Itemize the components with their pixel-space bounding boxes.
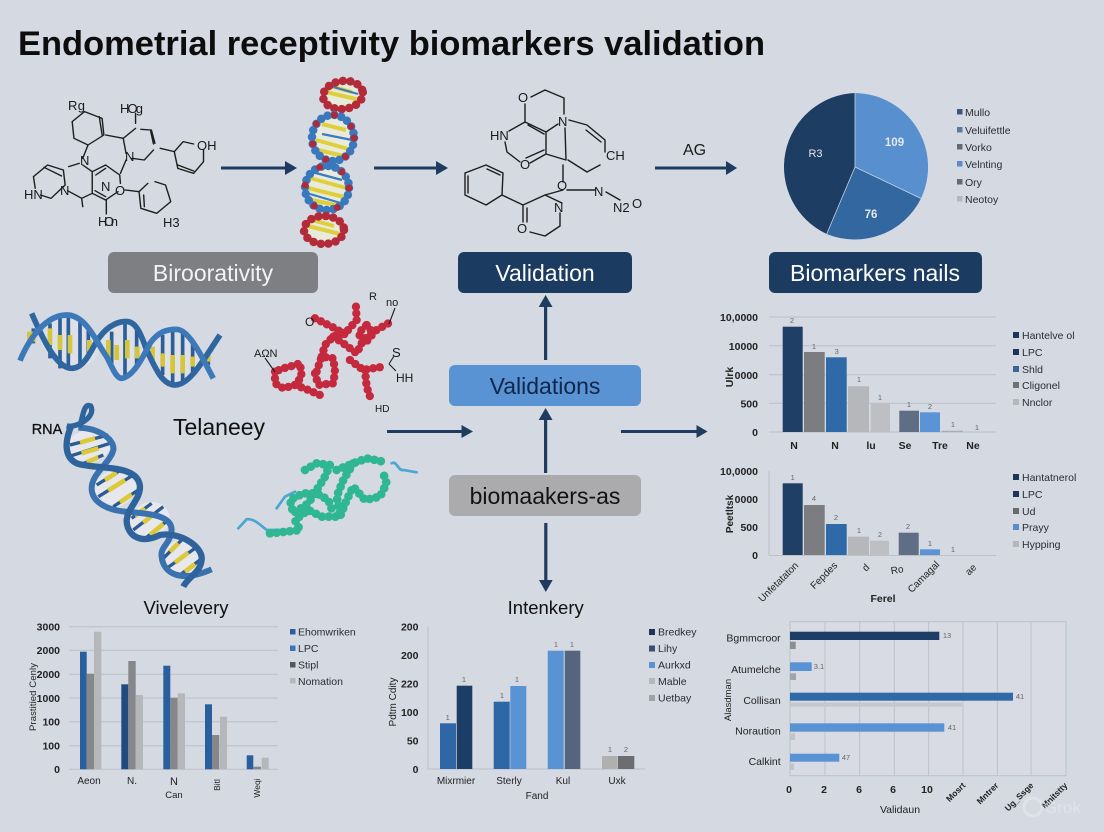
bar chart: bottom middle: 1 [446,713,450,722]
bar chart: top right: 10,0000 [720,312,758,324]
bar chart: bottom middle: 50 [407,736,419,748]
legend: pie: Vorko [965,142,992,154]
bar chart: top right: N [831,440,839,452]
bar chart: middle right: 0 [752,550,758,562]
bar chart: bottom left: 100 [42,740,60,752]
horizontal bar chart: bottom right: Collisan [743,695,781,707]
bar chart: bottom left: Can [165,790,183,801]
bar chart: middle right: Peetltsk [725,494,736,533]
bar chart: bottom middle: 1 [515,675,519,684]
bar chart: middle right: 0000 [735,494,758,506]
bar chart: bottom left: Aeon [77,776,101,787]
bar chart: bottom middle: Pdtm Cdity [388,678,399,726]
legend: bottom left bar chart: Ehomwriken [298,626,356,638]
pill: Biomarkers nails: Biomarkers nails [790,260,960,286]
legend: middle right bar chart: Hypping [1022,539,1061,551]
icon: molecule structure 1: HN [24,187,43,202]
icon: molecule structure 1: O [115,183,125,198]
watermark: Grok [1024,798,1081,817]
horizontal bar chart: bottom right: Noraution [735,726,781,738]
bar chart: bottom left: 2000 [37,645,60,657]
bar chart: bottom left: Weqi [252,778,262,798]
arrow: into Validations [387,425,473,438]
bar chart: bottom middle: Mixrmier [437,776,476,787]
bar chart: middle right: Ro [890,564,905,577]
bar chart: middle right [720,466,996,605]
icon: molecule structure 2: O [520,157,530,172]
bar chart: middle right: Fepdes [809,560,840,592]
legend: bottom middle bar chart [649,626,697,704]
icon: molecule structure 1 [24,98,216,230]
horizontal bar chart: bottom right [723,622,1070,816]
bar chart: middle right: Ferel [870,593,896,605]
label: AG: AG [683,142,706,159]
legend: top right bar chart: Hantelve ol [1022,330,1075,342]
bar chart: middle right: 1 [791,473,795,482]
icon: molecule structure 1: H3 [163,215,180,230]
bar chart: top right: 2 [928,402,932,411]
legend: top right bar chart: Shld [1022,364,1043,376]
bar chart: middle right: d [860,562,872,574]
icon: molecule structure 1: OH [197,138,216,153]
arrow: down to Intenkery [539,523,553,592]
bar chart: top right: N [790,440,798,452]
legend: middle right bar chart: Prayy [1022,522,1050,534]
icon: molecule structure 2: O [632,196,642,211]
bar chart: top right: 2 [790,316,794,325]
icon: molecule structure 1: HOn [98,214,118,229]
bar chart: top right: 10000 [729,341,758,353]
heading: Vivelevery: Vivelevery [143,597,229,618]
icon: molecule structure 1: N [60,183,69,198]
horizontal bar chart: bottom right: Ug_Ssge [1003,780,1036,813]
bar chart: bottom middle: 200 [401,650,419,662]
icon: red protein chain: O [305,315,314,329]
bar chart: top right: lu [866,440,876,452]
bar chart: bottom left: 0 [54,764,60,776]
arrow: up to Validations [539,408,552,473]
heading: Intenkery: Intenkery [508,597,584,618]
legend: pie: Neotoy [965,194,999,206]
legend: bottom middle bar chart: Mable [658,676,687,688]
horizontal bar chart: bottom right: 13 [943,631,951,640]
bar chart: bottom middle: Fand [526,791,548,802]
bar chart: bottom middle: 1 [500,691,504,700]
bar chart: bottom middle: 2 [624,745,628,754]
pie chart: 109 [885,137,904,149]
bar chart: middle right: Unfetataton [757,560,801,605]
icon: molecule structure 1: N [125,149,134,164]
legend: pie [957,107,1011,206]
legend: top right bar chart: Cligonel [1022,380,1060,392]
watermark: Grok: Grok [1044,798,1081,817]
bar chart: top right: 1 [975,423,979,432]
pill: biomarkers: biomaakers-as [470,483,620,509]
bar chart: top right: 3 [835,347,839,356]
arrow: DNA to structure [374,161,448,175]
icon: molecule structure 2: N [594,184,603,199]
arrow: up to Validation [539,295,552,360]
icon: beaded DNA double helix [304,78,365,244]
bar chart: middle right: 1 [951,545,955,554]
bar chart: bottom left: Prastitied Cenly [28,663,39,731]
legend: bottom left bar chart [290,626,356,688]
bar chart: bottom left: N [170,776,178,788]
pie chart [784,93,928,240]
icon: molecule structure 2: HN [490,128,509,143]
horizontal bar chart: bottom right: 3.1 [814,662,824,671]
icon: red protein chain: AΩN [254,348,278,360]
title: Endometrial receptivity biomarkers validation [18,25,765,63]
pill: Validation [458,252,632,293]
bar chart: bottom middle: Kul [556,776,570,787]
bar chart: middle right: ae [963,562,979,578]
bar chart: middle right: 2 [878,530,882,539]
icon: molecule structure 1: HOg [120,101,143,116]
legend: middle right bar chart: Hantatnerol [1022,472,1076,484]
label: Telaneey: Telaneey [173,414,266,440]
bar chart: bottom left [28,622,278,801]
horizontal bar chart: bottom right: 2 [821,784,827,796]
bar chart: middle right: 1 [857,526,861,535]
bar chart: middle right: 1 [928,539,932,548]
bar chart: bottom middle [388,622,645,802]
icon: red protein chain: HH [396,371,413,385]
bar chart: bottom left: Bitl [212,779,222,791]
horizontal bar chart: bottom right: 41 [948,723,956,732]
legend: top right bar chart: LPC [1022,347,1043,359]
legend: bottom left bar chart: Nomation [298,676,343,688]
icon: molecule structure 1: N [80,153,89,168]
bar chart: bottom middle: Sterly [496,776,522,787]
arrow: structure to pie [655,161,737,175]
pie chart: 76 [865,209,877,221]
bar chart: bottom middle: 0 [413,764,419,776]
legend: pie: Ory [965,177,983,189]
pill: Bioreactivity: Biroorativity [153,260,274,286]
bar chart: top right [720,312,996,452]
icon: diagonal RNA ribbon: RNA [32,422,63,438]
bar chart: top right: 0000 [735,370,758,382]
horizontal bar chart: bottom right: Atumelche [731,664,781,676]
bar chart: top right: Ulrk [724,367,736,387]
legend: middle right bar chart: Ud [1022,506,1036,518]
horizontal bar chart: bottom right: Validaun [880,804,920,816]
bar chart: bottom middle: 1 [462,675,466,684]
horizontal bar chart: bottom right: Mnitstty [1039,780,1070,810]
bar chart: top right: 1 [878,393,882,402]
pie chart: R3 [808,148,823,160]
icon: red protein chain: no [386,297,398,309]
legend: bottom middle bar chart: Aurkxd [658,660,691,672]
bar chart: top right: Se [899,440,912,452]
legend: bottom middle bar chart: Lihy [658,643,678,655]
horizontal bar chart: bottom right: Bgmmcroor [726,632,781,644]
legend: bottom left bar chart: LPC [298,643,319,655]
icon: diagonal RNA ribbon [32,405,212,587]
bar chart: bottom middle: 1 [570,640,574,649]
legend: pie: Mullo [965,107,990,119]
legend: bottom middle bar chart: Uetbay [658,692,692,704]
icon: molecule structure 2: O [557,178,567,193]
icon: molecule structure 1: Rg [68,98,85,113]
pill: Bioreactivity [108,252,318,293]
icon: molecule structure 1: N [101,179,110,194]
bar chart: bottom left: 3000 [37,622,60,634]
bar chart: bottom middle: Uxk [608,776,627,787]
bar chart: top right: 500 [740,398,758,410]
icon: green protein chain [238,458,417,533]
icon: molecule structure 2: N [558,114,567,129]
bar chart: middle right: 2 [834,513,838,522]
bar chart: bottom left: N. [127,776,137,787]
pill: Biomarkers nails [769,252,982,293]
icon: horizontal DNA ribbon [20,313,220,385]
bar chart: top right: 1 [812,342,816,351]
legend: bottom left bar chart: Stipl [298,660,318,672]
arrow: out to bar charts [621,425,708,438]
legend: pie: Veluifettle [965,125,1011,137]
horizontal bar chart: bottom right: 6 [856,784,862,796]
pill: Validations: Validations [490,373,600,399]
bar chart: bottom middle: 1 [608,745,612,754]
bar chart: top right: Ne [966,440,980,452]
horizontal bar chart: bottom right: 6 [890,784,896,796]
pill: Validations [449,365,641,406]
bar chart: middle right: Camagal [906,559,942,595]
pill: Validation: Validation [495,260,595,286]
bar chart: top right: 0 [752,427,758,439]
icon: red protein chain [254,291,413,415]
horizontal bar chart: bottom right: 0 [786,784,792,796]
bar chart: top right: 1 [857,375,861,384]
icon: red protein chain: R [369,291,377,303]
icon: molecule structure 2: N2 [613,200,630,215]
bar chart: bottom middle: 200 [401,622,419,634]
horizontal bar chart: bottom right: 41 [1016,692,1024,701]
bar chart: middle right: 10,0000 [720,466,758,478]
bar chart: bottom left: 100 [42,716,60,728]
icon: molecule structure 2 [465,90,642,236]
icon: red protein chain: HD [375,404,389,415]
bar chart: middle right: 2 [906,522,910,531]
bar chart: middle right: 500 [740,522,758,534]
icon: molecule structure 2: N [554,200,563,215]
icon: molecule structure 2: O [517,221,527,236]
horizontal bar chart: bottom right: Calkint [749,756,781,768]
legend: top right bar chart [1013,330,1075,409]
horizontal bar chart: bottom right: Alasdman [723,679,734,721]
arrow: molecule to DNA [221,161,297,175]
bar chart: bottom middle: 1 [554,640,558,649]
horizontal bar chart: bottom right: 47 [842,753,850,762]
bar chart: top right: 1 [907,400,911,409]
icon: red protein chain: S [392,345,401,360]
legend: middle right bar chart: LPC [1022,489,1043,501]
legend: pie: Velnting [965,159,1003,171]
legend: top right bar chart: Nnclor [1022,397,1053,409]
legend: bottom middle bar chart: Bredkey [658,626,697,638]
horizontal bar chart: bottom right: Mosrt [944,780,968,804]
bar chart: bottom left: 1000 [37,693,60,705]
bar chart: top right: 1 [951,420,955,429]
bar chart: bottom middle: 220 [401,678,419,690]
horizontal bar chart: bottom right: Mntrer [975,780,1001,806]
icon: molecule structure 2: O [518,90,528,105]
pill: biomarkers [449,475,641,516]
bar chart: bottom middle: 100 [401,707,419,719]
icon: molecule structure 2: CH [606,148,625,163]
bar chart: middle right: 4 [812,494,816,503]
bar chart: top right: Tre [932,440,948,452]
bar chart: bottom left: 2000 [37,669,60,681]
horizontal bar chart: bottom right: 10 [921,784,933,796]
legend: middle right bar chart [1013,472,1076,551]
